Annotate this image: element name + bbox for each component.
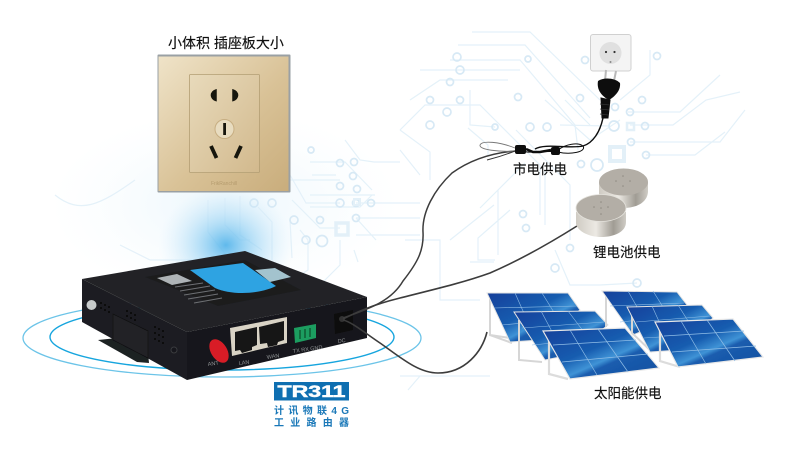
side screw [86,300,96,310]
icon: black plug [598,70,620,118]
label: lithium battery: 锂电池供电 [593,245,660,260]
LAN port [235,327,257,353]
port labels [207,338,346,368]
solar panel: middle left [514,311,608,362]
side bracket plate [113,314,148,358]
QR code [157,274,192,285]
top label panel [145,260,301,306]
loop wires [480,142,515,151]
vent dots [100,302,164,344]
background: soft haze [50,110,400,300]
product subtitle: 计讯物联4G [274,404,349,417]
port labels: LAN [238,360,250,367]
port labels: DC [337,338,346,345]
background: circuit traces [55,32,745,390]
icon: top-left socket hole [211,90,216,100]
icon: batteries [576,168,648,237]
background: square chips [336,123,634,235]
label text lines [175,283,222,303]
label: mains power: 市电供电 [513,161,567,177]
product logo: TR311 [274,382,349,429]
port labels: TX RX GND [292,345,323,355]
top face [82,251,367,332]
socket brand: FrikRanchill [211,181,237,187]
icon: lower slots [211,146,241,158]
solar panel: middle right [627,305,713,352]
green terminal [294,324,316,343]
port labels: WAN [266,353,280,361]
side screw 2 [171,347,177,353]
rings around router [23,299,421,377]
solar panel: back right [602,291,687,335]
panel: gold wall socket [158,54,290,192]
cable: to mains [343,151,515,318]
cable: to battery [343,226,577,319]
sticker [255,268,291,282]
solar array [487,291,763,379]
cable: to solar [343,320,487,373]
product logo: TR311: 工业路由器 [274,416,349,429]
icon: white wall outlet [590,34,631,71]
bracket [98,337,149,363]
router [82,251,367,380]
antenna connector [205,336,233,366]
left face [82,279,187,380]
cable: plug to splitter [480,118,603,160]
solar panel: back left [487,293,580,343]
solar panel: front right [655,319,763,367]
icon: earth slot [223,123,226,135]
blue glow under socket [158,187,294,303]
screen glow on top [190,263,276,293]
product logo: TR311: TR311 [278,382,346,401]
DC jack [334,310,353,334]
icon: earth socket ring [215,120,234,138]
label: solar power: 太阳能供电 [594,386,662,401]
solar panel: front left [543,328,659,379]
heading: small size: 小体积 插座板大小 [168,35,284,51]
background: circuit nodes [250,52,660,287]
splitter [515,145,526,154]
icon: top-right socket hole [233,90,238,100]
ethernet housing [230,317,287,356]
front face [187,297,367,380]
port labels: ANT [207,360,220,368]
WAN port [259,321,284,347]
